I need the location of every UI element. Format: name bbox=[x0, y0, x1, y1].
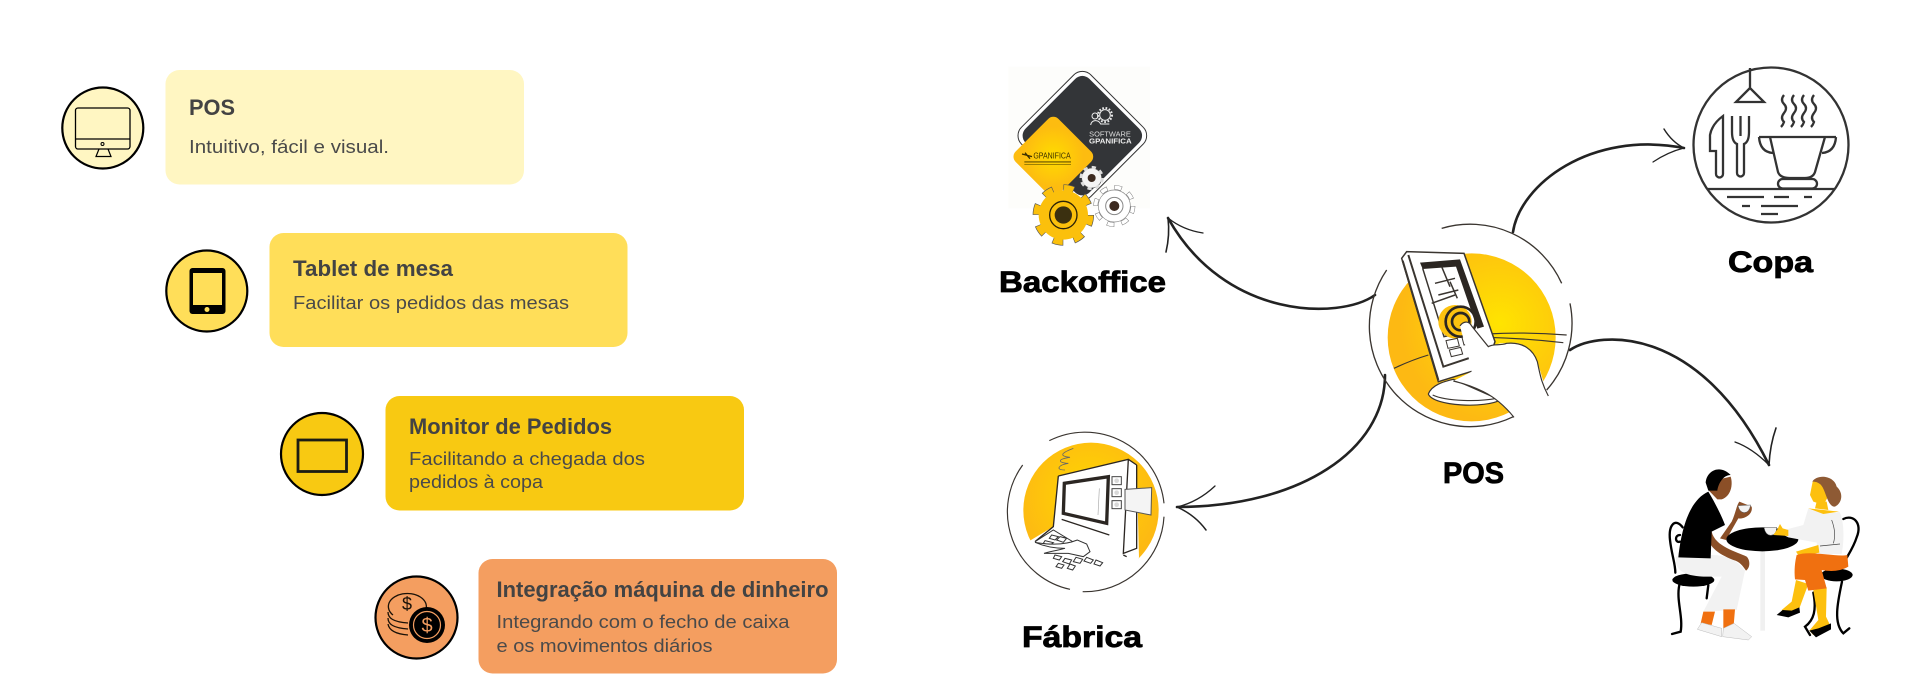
card: POS bbox=[166, 70, 524, 184]
description: Integração máquina de dinheiro: e os movimentos diários bbox=[496, 635, 712, 656]
icon: wide screen bbox=[281, 413, 363, 495]
heading: Tablet de mesa: Tablet de mesa bbox=[293, 256, 454, 281]
icon: desktop monitor bbox=[62, 88, 143, 168]
panel: POS feature row bbox=[62, 70, 524, 184]
icon: tablet bbox=[166, 250, 247, 332]
arrow: POS to Copa bbox=[1513, 129, 1684, 232]
illustration: Backoffice software logo: SOFTWARE bbox=[1089, 131, 1131, 138]
label: Fábrica: Fábrica bbox=[1022, 621, 1143, 654]
description: Monitor de Pedidos: pedidos à copa bbox=[409, 471, 544, 492]
panel: Monitor de Pedidos feature row bbox=[281, 396, 744, 510]
description: Tablet de mesa: Facilitar os pedidos das mesas bbox=[293, 292, 569, 313]
table bbox=[1726, 527, 1798, 631]
right chair bbox=[1805, 518, 1859, 635]
label: Copa: Copa bbox=[1728, 246, 1814, 279]
arrow: POS to Fábrica bbox=[1177, 375, 1385, 530]
description: Monitor de Pedidos: Facilitando a chegada dos bbox=[409, 448, 645, 469]
card: Integração máquina de dinheiro bbox=[478, 559, 837, 674]
woman bbox=[1773, 477, 1848, 637]
panel: Integração máquina de dinheiro feature row bbox=[376, 559, 837, 674]
heading: Monitor de Pedidos: Monitor de Pedidos bbox=[409, 414, 612, 439]
heading: Integração máquina de dinheiro: Integração máquina de dinheiro bbox=[496, 577, 828, 602]
illustration: customers at cafe table bbox=[1670, 469, 1859, 640]
icon: coins: $ bbox=[421, 615, 433, 637]
illustration: Backoffice software logo bbox=[1008, 66, 1152, 242]
panel: Tablet de mesa feature row bbox=[166, 233, 628, 347]
description: Integração máquina de dinheiro: Integrando com o fecho de caixa bbox=[496, 611, 790, 632]
heading: POS: POS bbox=[189, 95, 235, 120]
label: Backoffice: Backoffice bbox=[999, 266, 1166, 299]
arrow: POS to Backoffice bbox=[1166, 218, 1375, 309]
description: POS: Intuitivo, fácil e visual. bbox=[189, 136, 389, 157]
arrow: POS to customers bbox=[1570, 340, 1776, 465]
left chair bbox=[1670, 523, 1708, 634]
icon: coins bbox=[376, 576, 458, 658]
card: Monitor de Pedidos bbox=[386, 396, 744, 510]
illustration: POS terminal touched by hand bbox=[1369, 224, 1572, 427]
illustration: Fábrica machine operator bbox=[1007, 432, 1164, 595]
man bbox=[1676, 469, 1752, 640]
label: POS: POS bbox=[1443, 457, 1504, 490]
illustration: Backoffice software logo: GPANIFICA bbox=[1033, 151, 1071, 161]
illustration: Backoffice software logo: GPANIFICA bbox=[1089, 138, 1132, 145]
icon: coins: $ bbox=[402, 594, 412, 614]
card: Tablet de mesa bbox=[270, 233, 628, 347]
illustration: Copa kitchen icon bbox=[1694, 68, 1848, 222]
